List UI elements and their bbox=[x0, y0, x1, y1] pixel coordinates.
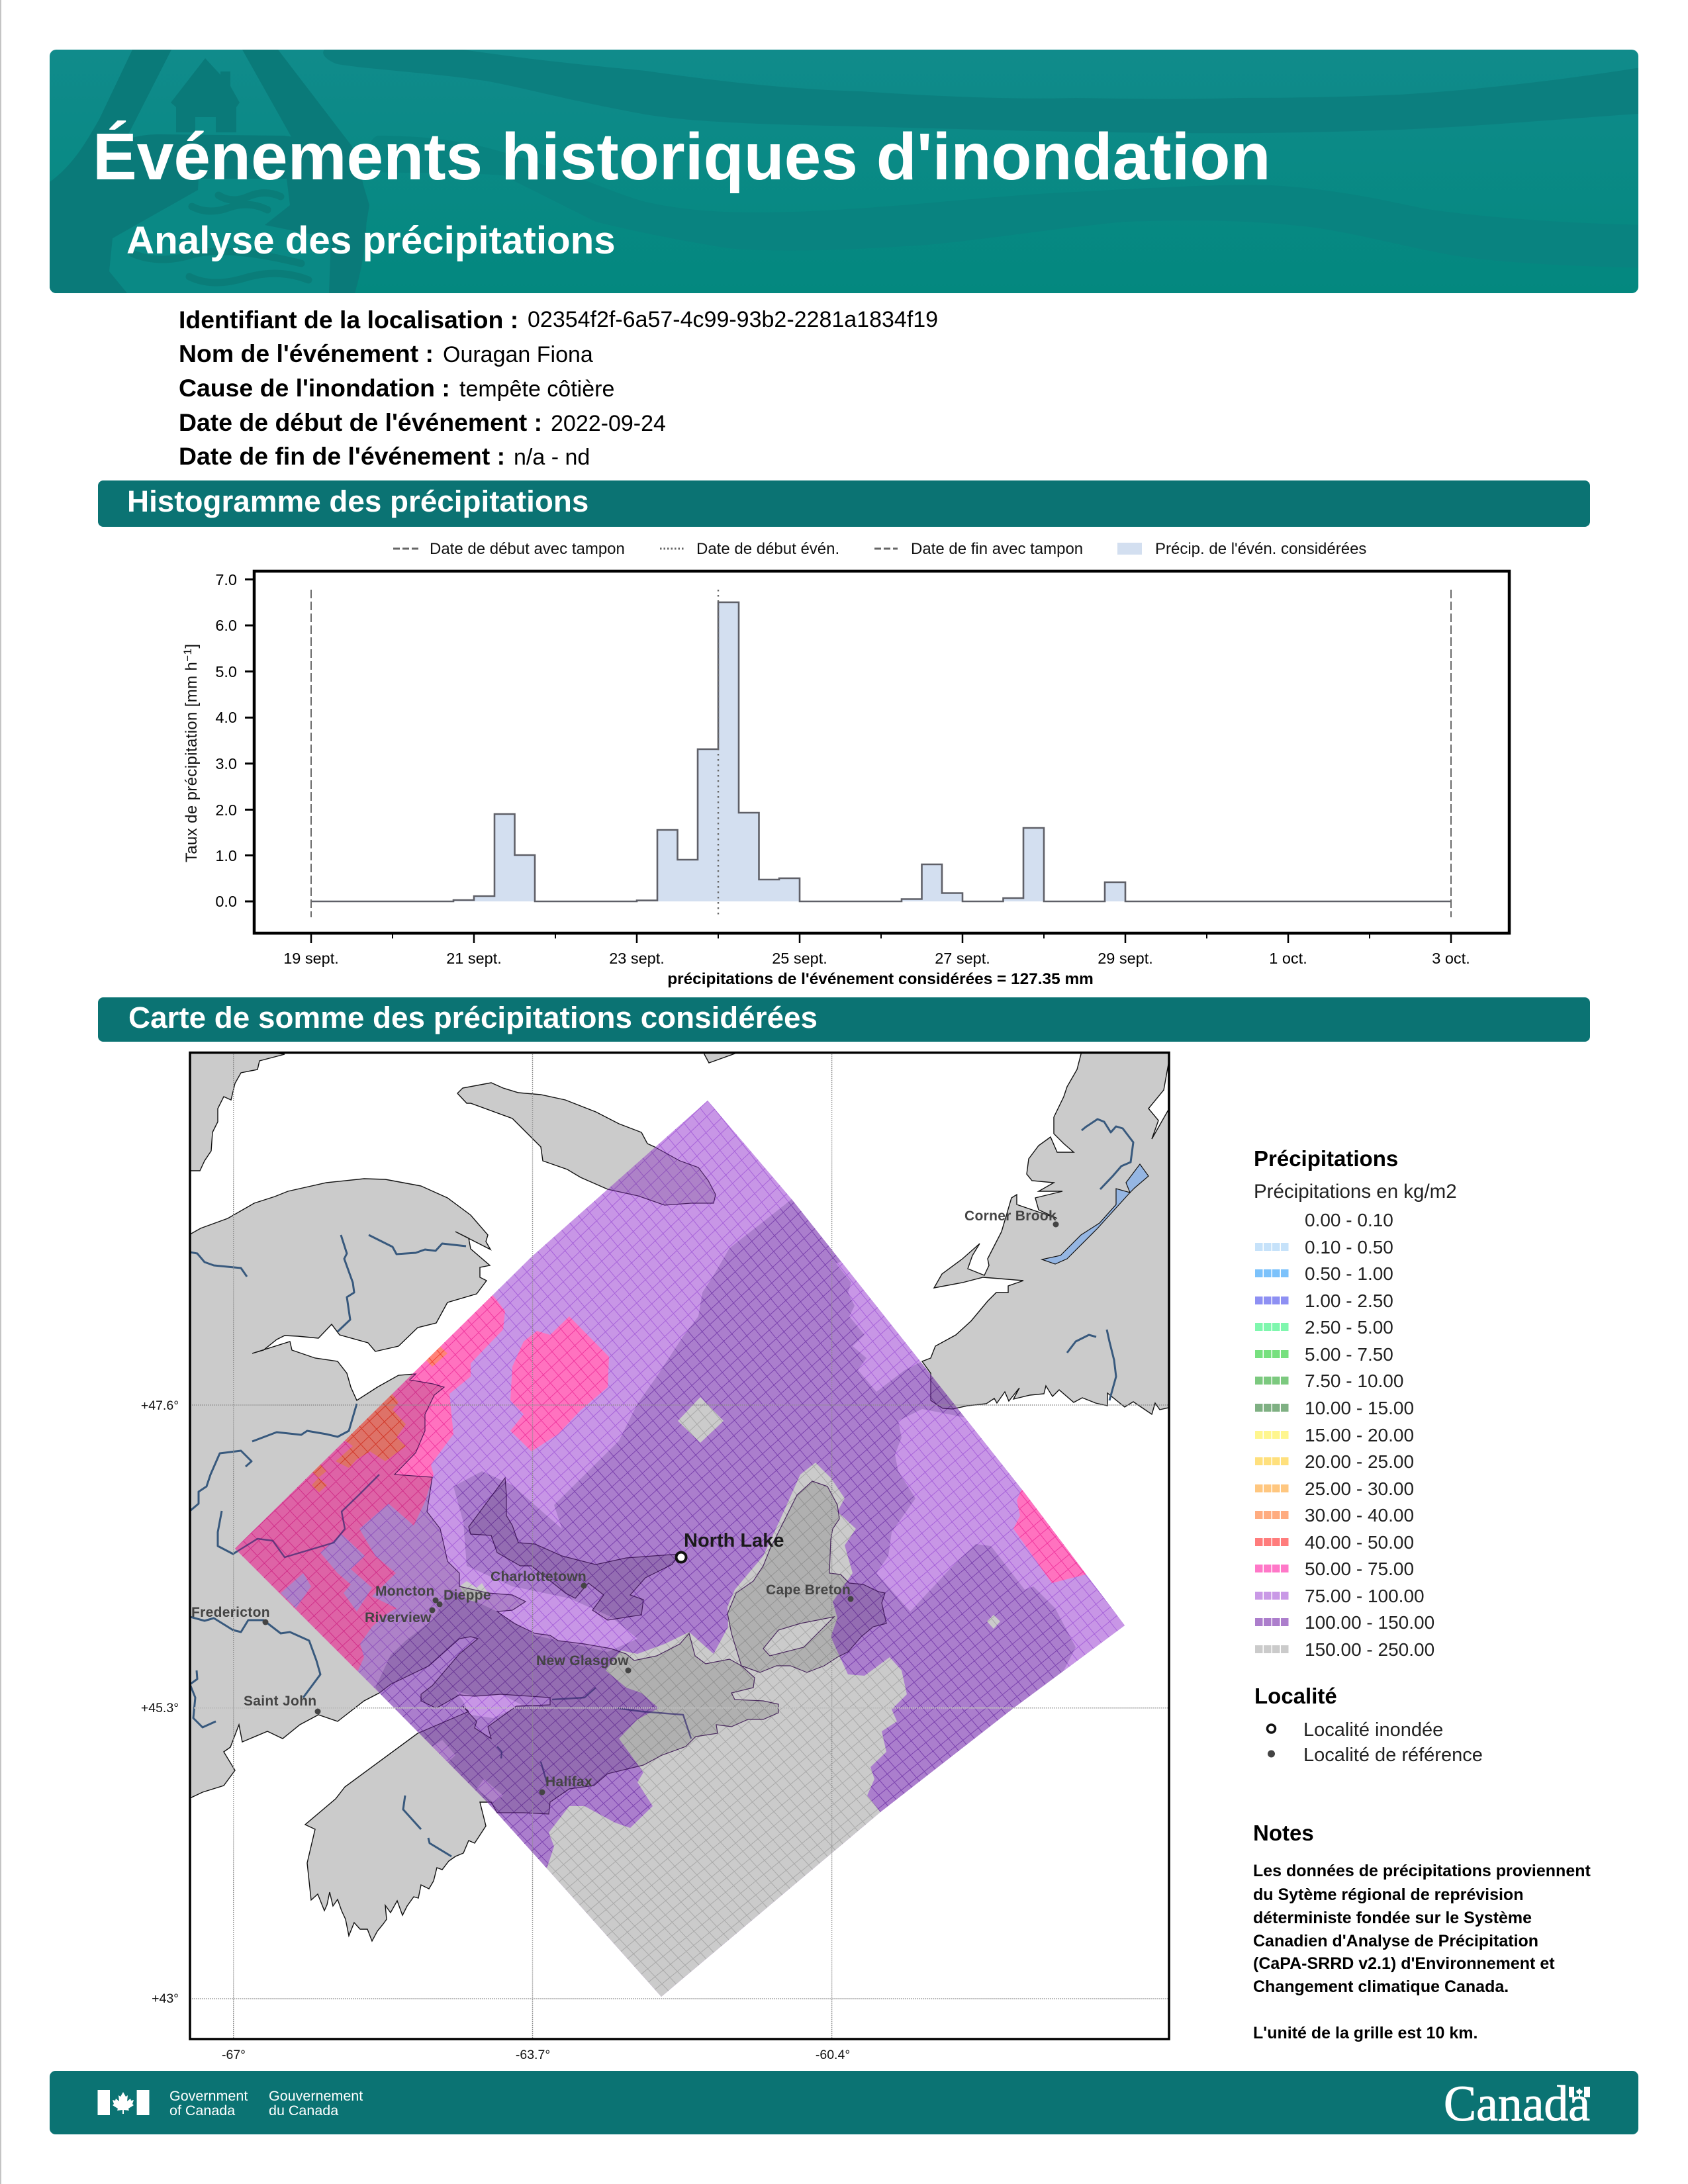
chart: precipitation histogram: 1.0 bbox=[215, 847, 237, 864]
legend: precipitation classes: 2.50 - 5.00 bbox=[1305, 1317, 1393, 1338]
chart: precipitation histogram: 3.0 bbox=[215, 755, 237, 772]
legend: locality bbox=[1254, 1684, 1483, 1766]
event information block: tempête côtière bbox=[459, 377, 614, 402]
event information block: Date de début de l'événement : bbox=[179, 408, 542, 436]
government wordmark: of Canada bbox=[169, 2103, 235, 2118]
legend: precipitation classes: 0.10 - 0.50 bbox=[1305, 1237, 1393, 1257]
chart: precipitation histogram: 29 sept. bbox=[1098, 950, 1153, 967]
legend: precipitation classes: 20.00 - 25.00 bbox=[1305, 1451, 1414, 1472]
event information block: 02354f2f-6a57-4c99-93b2-2281a1834f19 bbox=[528, 307, 938, 332]
notes: du Sytème régional de reprévision bbox=[1253, 1886, 1523, 1904]
map coordinate labels: -67° bbox=[222, 2048, 246, 2062]
event information block: Identifiant de la localisation : bbox=[179, 306, 518, 334]
notes: déterministe fondée sur le Système bbox=[1253, 1909, 1532, 1927]
legend: locality: Localité bbox=[1254, 1684, 1337, 1708]
chart: precipitation histogram: 1 oct. bbox=[1269, 950, 1307, 967]
event information block bbox=[179, 306, 938, 470]
chart: precipitation histogram: 3 oct. bbox=[1432, 950, 1470, 967]
place labels: Charlottetown bbox=[491, 1569, 586, 1584]
chart: precipitation histogram: 19 sept. bbox=[283, 950, 339, 967]
chart: precipitation histogram: Taux de précipitation [mm h bbox=[183, 662, 201, 862]
place labels: Dieppe bbox=[444, 1588, 491, 1603]
legend: locality: Localité de référence bbox=[1303, 1745, 1483, 1766]
legend: precipitation classes: 15.00 - 20.00 bbox=[1305, 1425, 1414, 1445]
event information block: Cause de l'inondation : bbox=[179, 374, 450, 402]
histogram legend: Date de début évén. bbox=[696, 540, 839, 558]
place labels: Cape Breton bbox=[766, 1582, 851, 1598]
notes: Canadien d'Analyse de Précipitation bbox=[1253, 1932, 1538, 1950]
legend: precipitation classes bbox=[1254, 1146, 1457, 1660]
legend: precipitation classes: 7.50 - 10.00 bbox=[1305, 1371, 1403, 1391]
icon: flood house watermark bbox=[50, 50, 369, 293]
legend: precipitation classes: 0.50 - 1.00 bbox=[1305, 1263, 1393, 1284]
government wordmark: du Canada bbox=[269, 2103, 338, 2118]
land masses and rivers bbox=[185, 1049, 1172, 1941]
event information block: n/a - nd bbox=[514, 445, 590, 470]
legend: precipitation classes: 150.00 - 250.00 bbox=[1305, 1639, 1434, 1660]
legend: precipitation classes: 10.00 - 15.00 bbox=[1305, 1398, 1414, 1418]
precipitation grid bbox=[235, 1101, 1125, 1997]
place labels: New Glasgow bbox=[536, 1653, 629, 1668]
map coordinate labels: +47.6° bbox=[141, 1398, 179, 1413]
icon: Canada flag signature bbox=[98, 2090, 150, 2115]
map coordinate labels bbox=[141, 1398, 850, 2062]
government wordmark bbox=[169, 2088, 363, 2118]
chart: precipitation histogram: −1 bbox=[181, 649, 194, 662]
map coordinate labels: +45.3° bbox=[141, 1701, 179, 1715]
notes: Les données de précipitations proviennent bbox=[1253, 1862, 1591, 1880]
chart: precipitation histogram: 7.0 bbox=[215, 571, 237, 588]
chart: precipitation histogram: 27 sept. bbox=[935, 950, 990, 967]
histogram legend: Précip. de l'évén. considérées bbox=[1155, 540, 1366, 558]
map coordinate labels: +43° bbox=[152, 1991, 179, 2006]
map coordinate labels: -60.4° bbox=[816, 2048, 850, 2062]
map: precipitation sum bbox=[141, 1049, 1172, 2062]
legend: precipitation classes: 25.00 - 30.00 bbox=[1305, 1479, 1414, 1499]
place labels: Halifax bbox=[545, 1774, 592, 1790]
subtitle: Analyse des précipitations bbox=[126, 219, 616, 262]
header banner bbox=[50, 50, 1648, 293]
event information block: Nom de l'événement : bbox=[179, 340, 434, 367]
place labels: Moncton bbox=[375, 1584, 435, 1599]
event information block: 2022-09-24 bbox=[551, 411, 666, 436]
legend: locality: Localité inondée bbox=[1303, 1719, 1443, 1741]
legend: precipitation classes: 30.00 - 40.00 bbox=[1305, 1505, 1414, 1525]
legend: precipitation classes: Précipitations bbox=[1254, 1146, 1398, 1171]
histogram legend: Date de fin avec tampon bbox=[911, 540, 1083, 558]
footer banner bbox=[50, 2071, 1638, 2134]
chart: precipitation histogram: 6.0 bbox=[215, 617, 237, 634]
government wordmark: Gouvernement bbox=[269, 2088, 363, 2104]
place labels: North Lake bbox=[684, 1530, 784, 1551]
chart: precipitation histogram: 2.0 bbox=[215, 801, 237, 819]
place labels: Fredericton bbox=[191, 1605, 270, 1620]
section heading: map bbox=[98, 997, 1590, 1042]
notes: L'unité de la grille est 10 km. bbox=[1253, 2024, 1477, 2042]
legend: precipitation classes: 50.00 - 75.00 bbox=[1305, 1559, 1414, 1579]
histogram legend bbox=[393, 540, 1366, 558]
legend: precipitation classes: 5.00 - 7.50 bbox=[1305, 1344, 1393, 1365]
place labels: Corner Brook bbox=[964, 1208, 1056, 1224]
legend: precipitation classes: 100.00 - 150.00 bbox=[1305, 1612, 1434, 1633]
legend: precipitation classes: 0.00 - 0.10 bbox=[1305, 1210, 1393, 1230]
event information block: Ouragan Fiona bbox=[443, 342, 593, 367]
histogram legend: Date de début avec tampon bbox=[430, 540, 625, 558]
Canada wordmark: Canada bbox=[1444, 2076, 1590, 2132]
notes: Notes bbox=[1253, 1821, 1314, 1845]
chart: precipitation histogram: 23 sept. bbox=[609, 950, 665, 967]
chart: precipitation histogram: ] bbox=[183, 644, 201, 649]
event information block: Date de fin de l'événement : bbox=[179, 442, 505, 470]
chart: precipitation histogram: 4.0 bbox=[215, 709, 237, 726]
chart: precipitation histogram: 25 sept. bbox=[772, 950, 827, 967]
government wordmark: Government bbox=[169, 2088, 248, 2104]
legend: precipitation classes: 75.00 - 100.00 bbox=[1305, 1586, 1425, 1606]
section heading: histogram bbox=[98, 480, 1590, 527]
chart: precipitation histogram: 0.0 bbox=[215, 893, 237, 910]
notes: (CaPA-SRRD v2.1) d'Environnement et bbox=[1253, 1954, 1555, 1973]
legend: precipitation classes: 40.00 - 50.00 bbox=[1305, 1532, 1414, 1553]
place labels: Riverview bbox=[365, 1610, 432, 1625]
chart: precipitation histogram: 21 sept. bbox=[446, 950, 502, 967]
map coordinate labels: -63.7° bbox=[516, 2048, 550, 2062]
notes: Changement climatique Canada. bbox=[1253, 1978, 1509, 1996]
legend: precipitation classes: Précipitations en kg/m2 bbox=[1254, 1181, 1457, 1203]
place labels: Saint John bbox=[244, 1694, 316, 1709]
place labels bbox=[191, 1208, 1059, 1795]
legend: precipitation classes: 1.00 - 2.50 bbox=[1305, 1291, 1393, 1311]
chart: precipitation histogram bbox=[181, 571, 1509, 988]
chart: precipitation histogram: précipitations de l'événement considérées = 127.35 mm bbox=[667, 970, 1094, 988]
section heading: map: Carte de somme des précipitations considérées bbox=[128, 1001, 818, 1034]
notes bbox=[1253, 1821, 1591, 2042]
section heading: histogram: Histogramme des précipitations bbox=[127, 484, 588, 518]
chart: precipitation histogram: 5.0 bbox=[215, 663, 237, 680]
title: Événements historiques d'inondation bbox=[93, 120, 1271, 194]
